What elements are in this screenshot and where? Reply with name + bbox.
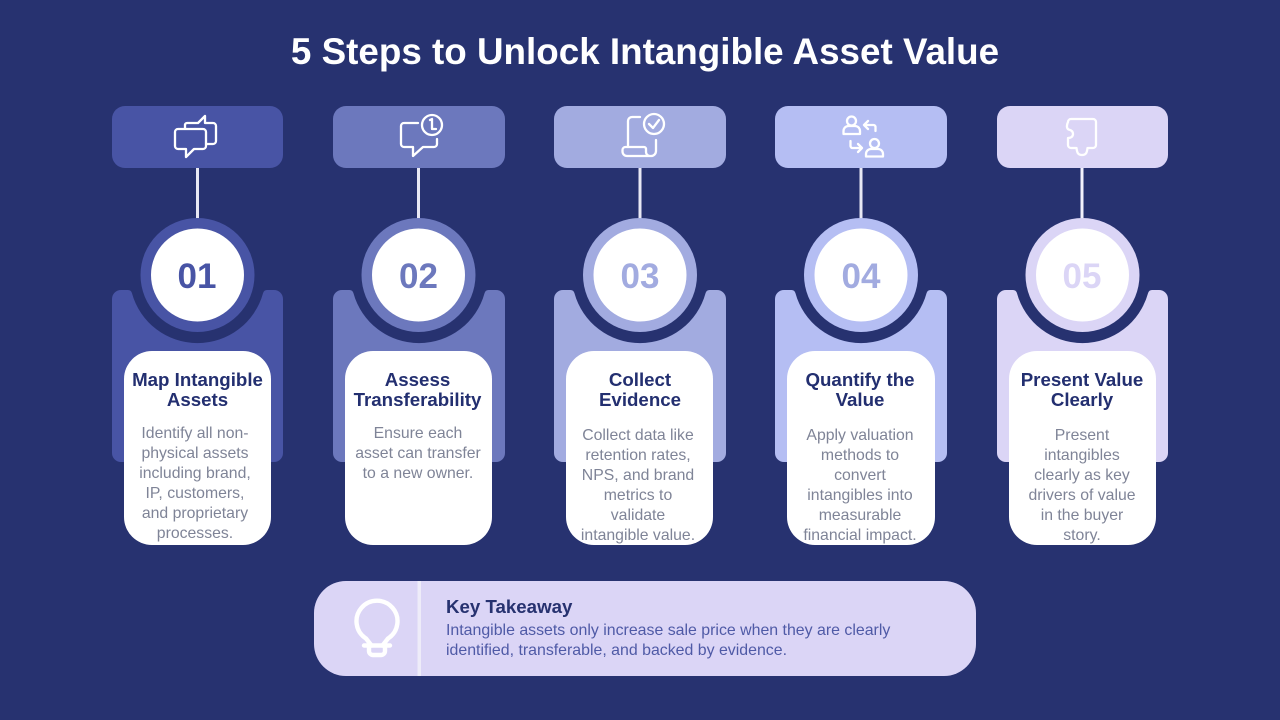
card 4: methods to bbox=[821, 447, 899, 464]
connector 5 bbox=[1080, 168, 1084, 220]
card 1: IP, customers, bbox=[146, 485, 244, 502]
card 2: Transferability bbox=[354, 389, 482, 410]
number badge 2 bbox=[362, 218, 476, 332]
icon: puzzle piece bbox=[1067, 119, 1096, 155]
card 2: asset can transfer bbox=[355, 445, 481, 462]
card 1: processes. bbox=[157, 525, 233, 542]
step 5 bbox=[997, 106, 1168, 545]
body panel 2 bbox=[333, 290, 505, 462]
takeaway text bbox=[446, 622, 890, 659]
number badge 5: 05 bbox=[1063, 257, 1101, 296]
card 1 bbox=[124, 351, 271, 545]
card 5: Present bbox=[1055, 427, 1110, 444]
number badge 3: 03 bbox=[621, 257, 659, 296]
icon panel 4 bbox=[775, 106, 947, 168]
number badge 1: 01 bbox=[178, 257, 216, 296]
takeaway heading: Key Takeaway bbox=[446, 596, 573, 617]
icon: people exchange bbox=[844, 116, 883, 156]
number badge 1 bbox=[140, 218, 254, 332]
card 5: clearly as key bbox=[1034, 467, 1130, 484]
card 4: intangibles into bbox=[807, 487, 913, 504]
card 5: Clearly bbox=[1051, 389, 1114, 410]
card 1: physical assets bbox=[141, 445, 249, 462]
card 5: drivers of value bbox=[1028, 487, 1136, 504]
connector 1 bbox=[196, 168, 199, 220]
body panel 4 bbox=[775, 290, 947, 462]
number badge 5 bbox=[1026, 218, 1140, 332]
title: 5 Steps to Unlock Intangible Asset Value bbox=[291, 31, 999, 72]
card 5: intangibles bbox=[1044, 447, 1120, 464]
takeaway text: identified, transferable, and backed by evidence. bbox=[446, 642, 787, 659]
card 4: Value bbox=[836, 389, 884, 410]
card 1: Identify all non- bbox=[141, 425, 249, 442]
icon: chat with clock bbox=[401, 115, 442, 156]
number badge 2: 02 bbox=[399, 257, 438, 296]
card 3: metrics to bbox=[604, 487, 672, 504]
card 5: in the buyer bbox=[1041, 507, 1123, 524]
connector 3 bbox=[638, 168, 642, 220]
card 4: Quantify the bbox=[805, 369, 915, 390]
step 3 bbox=[554, 106, 726, 545]
card 5: Present Value bbox=[1021, 369, 1143, 390]
card 4 bbox=[787, 351, 935, 545]
card 3: Collect bbox=[609, 369, 671, 390]
number badge 4 bbox=[804, 218, 918, 332]
card 5 bbox=[1009, 351, 1156, 545]
card 2: Ensure each bbox=[374, 425, 462, 442]
key takeaway panel bbox=[314, 581, 976, 676]
card 4: Apply valuation bbox=[806, 427, 914, 444]
card 1: and proprietary bbox=[142, 505, 248, 522]
card 1: Assets bbox=[167, 389, 228, 410]
card 3: retention rates, bbox=[585, 447, 691, 464]
card 4: measurable bbox=[819, 507, 901, 524]
takeaway text: Intangible assets only increase sale price when they are clearly bbox=[446, 622, 890, 639]
card 5: story. bbox=[1063, 527, 1101, 544]
card 1: Map Intangible bbox=[132, 369, 263, 390]
step 2 bbox=[333, 106, 505, 545]
card 2: Assess bbox=[385, 369, 450, 390]
card 4: financial impact. bbox=[803, 527, 917, 544]
card 3 bbox=[566, 351, 713, 545]
connector 2 bbox=[417, 168, 420, 220]
card 1: including brand, bbox=[139, 465, 251, 482]
icon panel 5 bbox=[997, 106, 1168, 168]
body panel 1 bbox=[112, 290, 283, 462]
number badge 4: 04 bbox=[842, 257, 881, 296]
card 4: convert bbox=[834, 467, 887, 484]
step 1 bbox=[112, 106, 283, 545]
card 3: NPS, and brand bbox=[582, 467, 694, 484]
card 2 bbox=[345, 351, 492, 545]
card 3: validate bbox=[611, 507, 665, 524]
card 3: intangible value. bbox=[581, 527, 695, 544]
icon panel 2 bbox=[333, 106, 505, 168]
body panel 5 bbox=[997, 290, 1168, 462]
icon: scroll with check bbox=[622, 114, 664, 156]
icon: light bulb bbox=[356, 601, 397, 655]
icon panel 3 bbox=[554, 106, 726, 168]
icon: chat bubbles bbox=[175, 116, 216, 157]
card 3: Collect data like bbox=[582, 427, 694, 444]
icon panel 1 bbox=[112, 106, 283, 168]
card 3: Evidence bbox=[599, 389, 681, 410]
card 2: to a new owner. bbox=[363, 465, 473, 482]
connector 4 bbox=[860, 168, 862, 220]
number badge 3 bbox=[583, 218, 697, 332]
step 4 bbox=[775, 106, 947, 545]
body panel 3 bbox=[554, 290, 726, 462]
